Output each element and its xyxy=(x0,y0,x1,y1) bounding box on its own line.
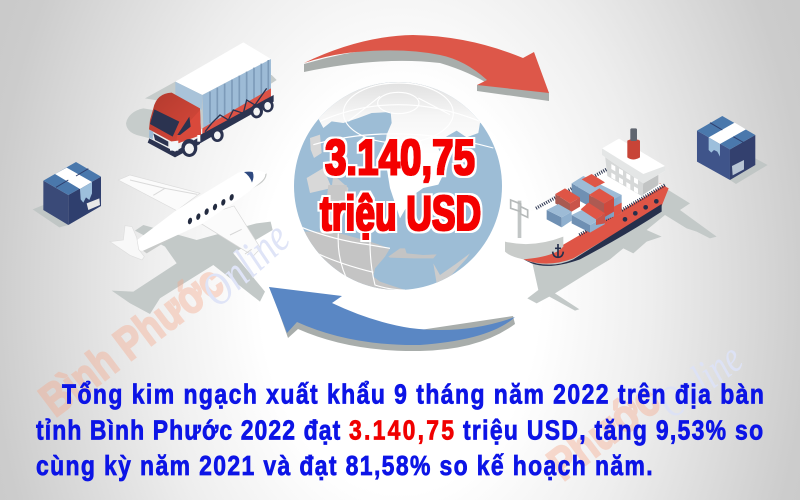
globe: graticule xyxy=(313,83,493,148)
icon: box left xyxy=(33,162,101,227)
watermark: Binh Phuoc Online right: Online xyxy=(649,333,751,428)
summary text: triệu USD, tăng 9,53% so xyxy=(463,415,763,446)
containers xyxy=(547,174,622,233)
watermark: Binh Phuoc Online left: Online xyxy=(191,212,299,316)
globe: northern land xyxy=(306,82,480,218)
summary text xyxy=(36,379,764,482)
icon: cargo ship xyxy=(505,128,717,311)
watermark: Binh Phuoc Online left: Bình Phước xyxy=(30,255,233,426)
globe: southern land xyxy=(302,185,470,290)
icon: box right xyxy=(697,116,768,184)
summary text: 3.140,75 xyxy=(349,415,454,446)
summary text: cùng kỳ năm 2021 và đạt 81,58% so kế hoạch năm. xyxy=(36,451,653,482)
globe value: 3.140,75 trieu USD xyxy=(320,130,481,241)
icon: airplane shadow xyxy=(112,222,273,314)
summary text: Tổng kim ngạch xuất khẩu 9 tháng năm 2022 trên địa bàn xyxy=(62,379,764,410)
arrow: red xyxy=(304,35,549,101)
globe xyxy=(290,78,506,298)
icon: truck xyxy=(126,42,277,157)
arrow: blue xyxy=(269,287,515,351)
watermark: Binh Phuoc Online right: Phước xyxy=(538,373,669,490)
globe value: 3.140,75 trieu USD: triệu USD xyxy=(320,187,481,241)
watermark: Binh Phuoc Online right xyxy=(538,333,751,490)
icon: airplane xyxy=(110,170,267,260)
globe value: 3.140,75 trieu USD: 3.140,75 xyxy=(325,130,475,186)
summary text: tỉnh Bình Phước 2022 đạt xyxy=(36,415,341,446)
